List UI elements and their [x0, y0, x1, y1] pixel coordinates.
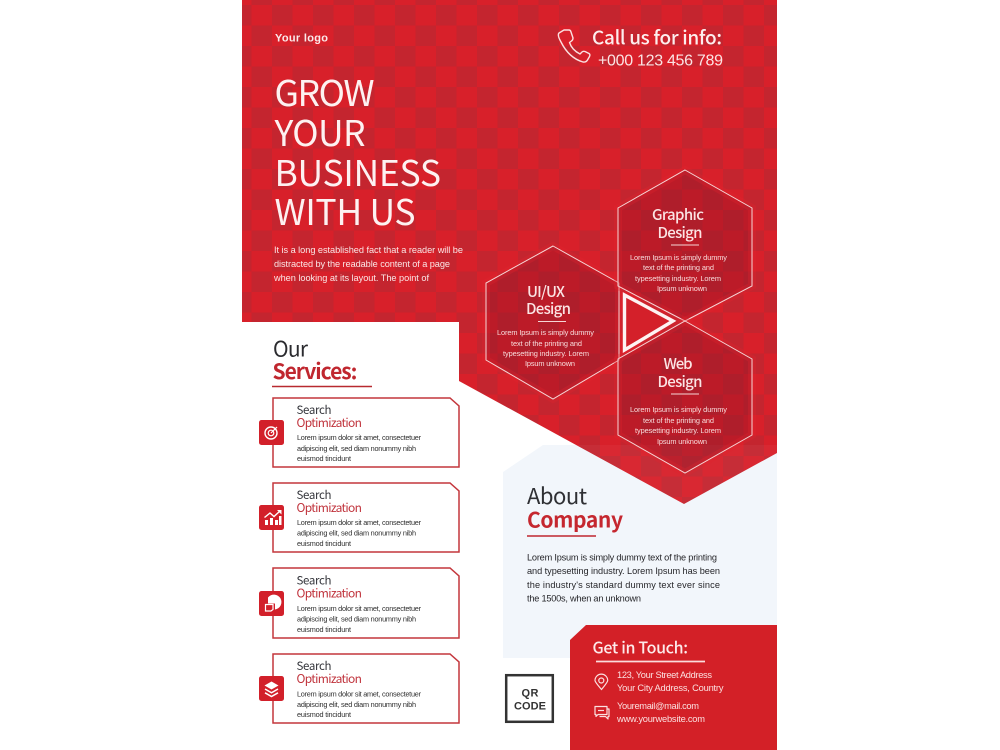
icon: target: [259, 420, 284, 445]
panel: hexagon Graphic Design: Design: [658, 222, 702, 243]
panel: hexagon Web Design: Web: [664, 353, 692, 374]
logo: Your logo: [275, 32, 328, 44]
heading: About Company: About: [527, 479, 587, 511]
heading: Our Services: Services:: [272, 356, 358, 386]
panel: service card 2: Lorem ipsum dolor sit amet, consectetuer: [297, 518, 422, 527]
phone number: +000 123 456 789: [598, 52, 723, 70]
panel: hexagon Graphic Design: text of the printing and: [643, 263, 714, 272]
panel: service card 1: [259, 398, 459, 467]
panel: service card 3: Lorem ipsum dolor sit amet, consectetuer: [297, 604, 422, 613]
panel: service card 2: adipiscing elit, sed diam nonummy nibh: [297, 528, 416, 538]
panel: hexagon Graphic Design: Ipsum unknown: [657, 284, 707, 293]
panel: service card 1: adipiscing elit, sed diam nonummy nibh: [297, 444, 416, 453]
panel: service card 4: Optimization: [296, 670, 362, 687]
icon: location pin: [595, 674, 608, 690]
call us heading: Call us for info:: [592, 24, 722, 50]
panel: service card 4: Search: [296, 658, 332, 674]
panel: hexagon UI/UX Design: typesetting industry. Lorem: [503, 349, 589, 358]
address text: [617, 670, 724, 693]
panel: service card 2: [259, 483, 459, 552]
about text: [527, 552, 720, 604]
panel: service card 4: [259, 654, 459, 723]
panel: hexagon Web Design: Design: [658, 371, 702, 392]
panel: hexagon UI/UX Design: [486, 246, 619, 399]
address text: Your City Address, Country: [617, 683, 724, 693]
panel: get in touch: [570, 625, 777, 750]
icon: phone: [558, 30, 590, 62]
panel: hexagon UI/UX Design: UI/UX: [527, 281, 565, 302]
panel: hexagon Graphic Design: Graphic: [652, 204, 704, 225]
title: WITH US: [274, 185, 416, 236]
title: BUSINESS: [274, 146, 441, 197]
panel: service card 3: euismod tincidunt: [297, 625, 351, 634]
QR code placeholder: CODE: [514, 700, 546, 712]
panel: service card 4: Lorem ipsum dolor sit amet, consectetuer: [297, 690, 422, 698]
QR code placeholder: [506, 675, 553, 722]
icon: chat bubbles: [595, 706, 609, 719]
panel: service card 4: adipiscing elit, sed diam nonummy nibh: [297, 700, 416, 709]
panel: hexagon UI/UX Design: Ipsum unknown: [525, 359, 575, 368]
panel: service card 3: adipiscing elit, sed diam nonummy nibh: [297, 614, 416, 624]
arrow: center triangle: [624, 295, 673, 350]
intro paragraph: [273, 245, 463, 283]
panel: hexagon UI/UX Design: Lorem Ipsum is simply dummy: [497, 328, 594, 337]
intro paragraph: when looking at its layout. The point of: [273, 273, 429, 283]
title: YOUR: [274, 106, 366, 157]
panel: hexagon UI/UX Design: Design: [526, 298, 571, 319]
panel: service card 3: Optimization: [296, 584, 362, 602]
contact text: Youremail@mail.com: [617, 701, 699, 711]
title: GROW: [274, 66, 374, 117]
panel: service card 2: Optimization: [296, 499, 362, 516]
heading: Our Services: [272, 334, 372, 386]
panel: service card 1: euismod tincidunt: [297, 454, 351, 463]
QR code placeholder: QR: [522, 688, 539, 700]
panel: service card 1: Lorem ipsum dolor sit amet, consectetuer: [297, 433, 422, 442]
panel: service card 3: Search: [296, 572, 332, 588]
address text: 123, Your Street Address: [617, 670, 712, 680]
panel: about company background: [503, 445, 777, 658]
heading: Our Services: Our: [273, 334, 309, 364]
panel: hexagon Graphic Design: [618, 170, 752, 321]
about text: and typesetting industry. Lorem Ipsum has been: [527, 566, 720, 576]
panel: hexagon Web Design: Lorem Ipsum is simply dummy: [630, 405, 727, 414]
icon: growth chart: [259, 505, 284, 530]
panel: hexagon Web Design: text of the printing and: [643, 416, 714, 425]
panel: service card 2: euismod tincidunt: [297, 539, 351, 548]
panel: service card 1: Optimization: [296, 414, 362, 431]
contact text: www.yourwebsite.com: [616, 714, 705, 724]
panel: hexagon Graphic Design: typesetting industry. Lorem: [635, 274, 721, 283]
panel: get in touch: Get in Touch:: [592, 634, 688, 658]
panel: hexagon UI/UX Design: text of the printing and: [511, 339, 582, 348]
about text: the industry's standard dummy text ever since: [527, 580, 720, 590]
about text: Lorem Ipsum is simply dummy text of the printing: [527, 552, 717, 562]
panel: hexagon Web Design: typesetting industry. Lorem: [635, 426, 721, 435]
icon: pie chart: [259, 591, 284, 616]
panel: hexagon Web Design: [618, 321, 752, 473]
contact text: [616, 701, 705, 724]
panel: hexagon Web Design: Ipsum unknown: [657, 437, 707, 446]
panel: service card 3: [259, 568, 459, 638]
panel: service card 4: euismod tincidunt: [297, 710, 351, 719]
intro paragraph: distracted by the readable content of a page: [274, 259, 450, 269]
panel: service card 2: Search: [296, 487, 332, 503]
intro paragraph: It is a long established fact that a reader will be: [274, 245, 463, 255]
panel: service card 1: Search: [296, 402, 332, 418]
icon: layers: [259, 676, 284, 701]
title: [274, 66, 441, 236]
panel: red checkered header: [242, 0, 777, 504]
about text: the 1500s, when an unknown: [527, 594, 641, 604]
heading: About Company: [527, 479, 623, 536]
panel: hexagon Graphic Design: Lorem Ipsum is simply dummy: [630, 253, 727, 262]
heading: About Company: Company: [527, 504, 623, 534]
